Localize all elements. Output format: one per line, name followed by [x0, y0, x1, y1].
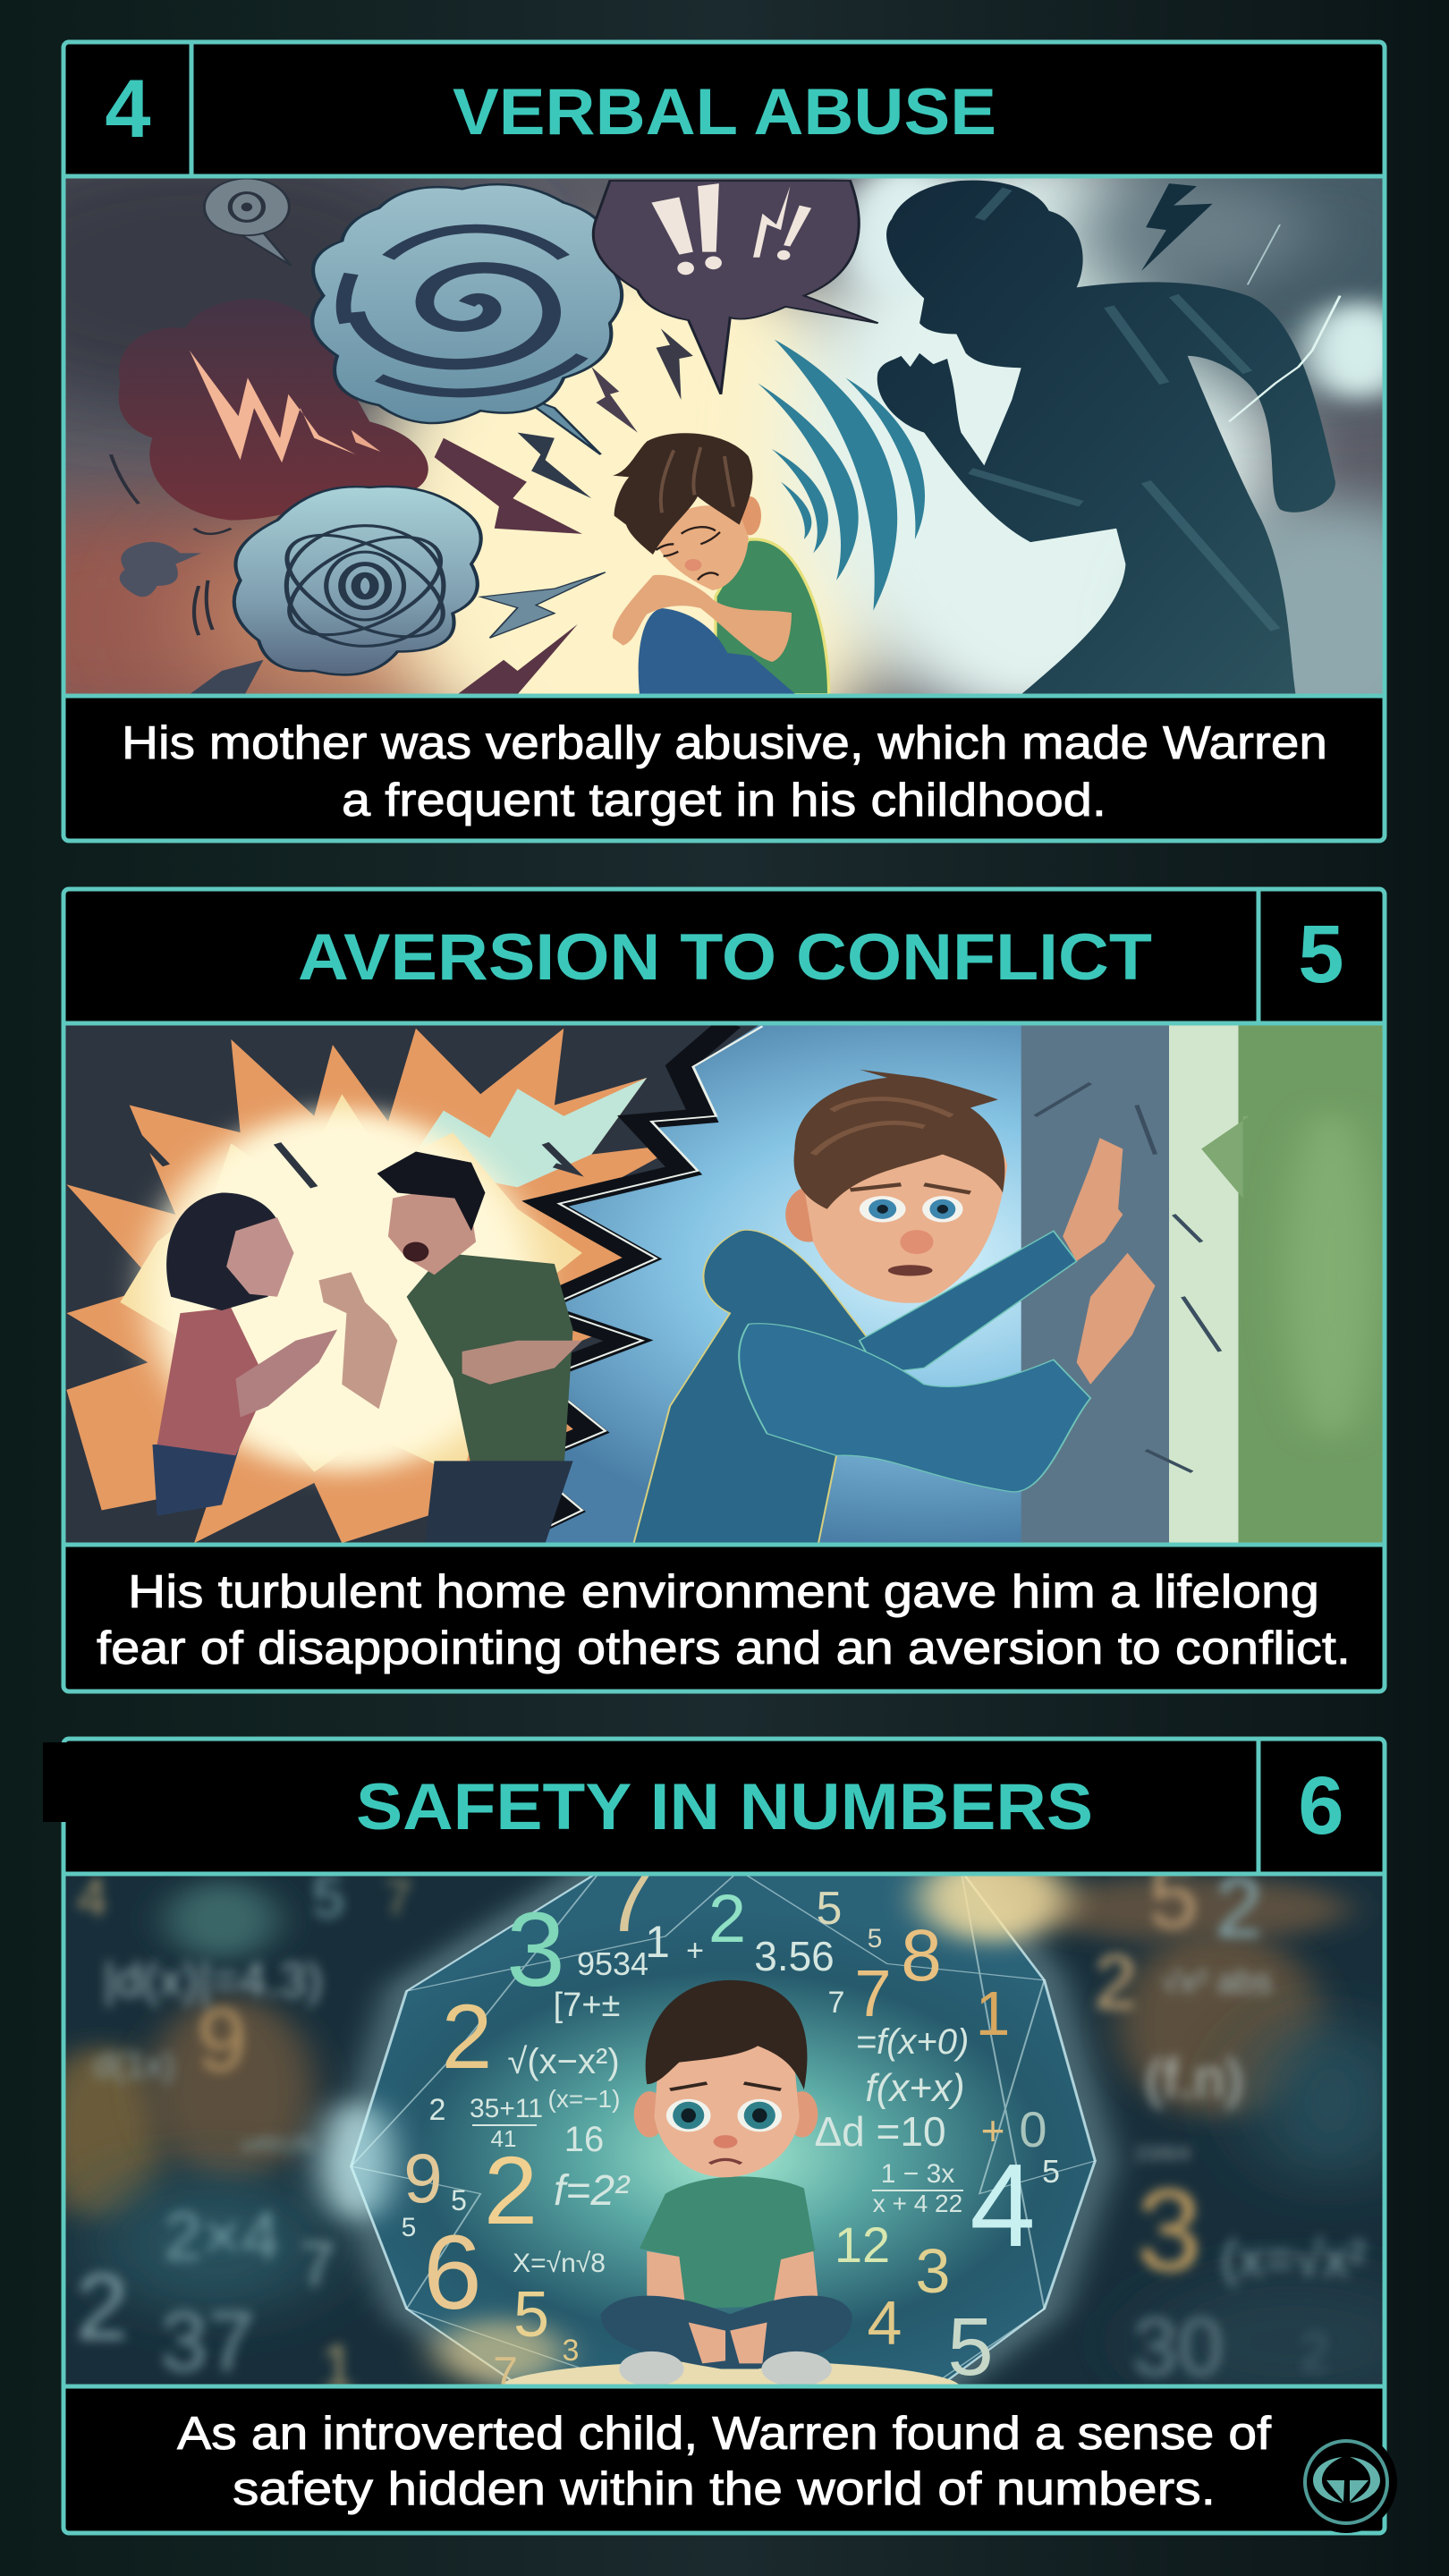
sharp numbers and formulas: =f(x+0)	[856, 2022, 969, 2062]
sharp numbers and formulas: f(x+x)	[865, 2066, 965, 2110]
sharp numbers and formulas: 5	[1042, 2153, 1060, 2190]
panel frame	[64, 1739, 1385, 2533]
blurred numbers right: √x² abs	[1161, 1963, 1272, 2001]
caption: safety in numbers: safety hidden within the world of numbers.	[233, 2463, 1216, 2515]
wall	[1021, 1023, 1391, 1548]
icon: tangled scribble cloud	[234, 487, 481, 674]
heading: verbal abuse: VERBAL ABUSE	[453, 76, 996, 148]
sharp numbers and formulas: 3.56	[754, 1933, 835, 1979]
blurred numbers left: u49125	[242, 2132, 313, 2157]
illustration: arguing parents and frightened boy at wall	[55, 1023, 1395, 1548]
icon: dark storm cloud with lightning	[119, 299, 428, 521]
number 5: 5	[1298, 909, 1344, 1000]
blurred numbers right: 3	[1137, 2165, 1201, 2295]
sharp numbers and formulas: 2	[429, 2093, 445, 2127]
icon: swirl thought cloud	[312, 184, 622, 454]
heading: safety in numbers: SAFETY IN NUMBERS	[356, 1771, 1093, 1843]
glass bubble	[318, 1854, 1095, 2416]
blurred numbers left: |d(x)|=4.3)	[103, 1953, 323, 2007]
sharp numbers and formulas: 4	[868, 2288, 902, 2358]
sharp numbers and formulas: 12	[835, 2216, 890, 2273]
sharp numbers and formulas	[402, 1851, 1060, 2398]
sharp numbers and formulas: 2	[708, 1881, 746, 1957]
number 6: 6	[1298, 1760, 1344, 1852]
icon: exclamation speech bubble	[593, 181, 878, 394]
blurred numbers left: 9	[197, 1990, 247, 2090]
caption: safety in numbers: As an introverted child, Warren found a sense of	[177, 2408, 1272, 2460]
sharp numbers and formulas: 5	[868, 1924, 882, 1953]
sharp numbers and formulas: [7+±	[554, 1987, 620, 2024]
blurred numbers right: 5	[1148, 1847, 1199, 1947]
icon: small dark puff	[111, 454, 263, 694]
blurred numbers right: (f.n)	[1145, 2048, 1243, 2110]
blurred numbers right: 23/6/4	[1135, 2142, 1191, 2165]
blurred background	[37, 1870, 1442, 2407]
blurred numbers left: d(1x)	[93, 2046, 175, 2085]
sharp numbers and formulas: (x=−1)	[548, 2085, 620, 2113]
sharp numbers and formulas: 8	[901, 1915, 942, 1996]
blurred numbers right	[1094, 1847, 1366, 2393]
icon: circular logo	[1295, 2431, 1397, 2533]
explosion burst	[66, 1029, 684, 1543]
sharp numbers and formulas: 35+11	[470, 2094, 543, 2123]
man shouting	[318, 1152, 582, 1543]
caption: aversion to conflict: His turbulent home environment gave him a lifelong	[128, 1566, 1319, 1618]
mother silhouette	[877, 181, 1335, 694]
sharp numbers and formulas: 9	[403, 2139, 443, 2217]
panel frame	[64, 889, 1385, 1691]
sharp numbers and formulas: 5	[817, 1883, 842, 1935]
sharp numbers and formulas: 1	[976, 1979, 1010, 2048]
sharp numbers and formulas: 0	[1019, 2101, 1047, 2157]
sharp numbers and formulas: 3	[916, 2236, 950, 2306]
sharp numbers and formulas: 16	[564, 2120, 604, 2159]
blurred numbers right: 2	[1300, 2322, 1330, 2382]
blurred numbers left: 2×4	[165, 2199, 279, 2275]
sharp numbers and formulas: 5	[947, 2301, 994, 2393]
sharp numbers and formulas: 9534	[577, 1945, 648, 1982]
blurred numbers right: 30	[1132, 2301, 1224, 2393]
blurred numbers left	[76, 1864, 411, 2402]
blurred numbers right: 2	[1094, 1940, 1137, 2025]
sharp numbers and formulas: 7	[604, 1851, 654, 1951]
sharp numbers and formulas: 2	[484, 2136, 538, 2244]
sharp numbers and formulas: 4	[970, 2140, 1036, 2271]
blurred numbers left: 4	[77, 1868, 107, 1928]
woman arguing	[152, 1192, 337, 1516]
sharp numbers and formulas: 3	[563, 2334, 579, 2368]
panel 6: safety in numbers	[37, 1739, 1442, 2533]
sharp numbers and formulas: 7	[493, 2348, 518, 2398]
sharp numbers and formulas: 5	[451, 2184, 467, 2216]
sharp numbers and formulas: x + 4 22	[873, 2190, 962, 2217]
sharp numbers and formulas: Δd =10	[814, 2108, 946, 2155]
illustration: child in bubble of numbers	[37, 1847, 1442, 2416]
blurred numbers left: 2	[76, 2255, 128, 2360]
boy pressed against wall	[633, 1070, 1156, 1546]
caption: safety in numbers	[177, 2408, 1272, 2515]
illustration: boy and shouting mother	[66, 179, 1383, 694]
caption: verbal abuse: a frequent target in his childhood.	[342, 775, 1106, 826]
heading: aversion to conflict: AVERSION TO CONFLICT	[298, 921, 1152, 994]
caption: aversion to conflict	[97, 1566, 1351, 1674]
sharp numbers and formulas: +	[686, 1934, 704, 1968]
panel 4: verbal abuse	[0, 42, 1449, 841]
icon: lightning on storm sky	[1141, 183, 1340, 421]
caption: verbal abuse: His mother was verbally abusive, which made Warren	[122, 717, 1327, 769]
sharp numbers and formulas: √(x−x²)	[507, 2042, 620, 2081]
black patch over frame corner	[43, 1742, 79, 1822]
sharp numbers and formulas: X=√n√8	[513, 2249, 606, 2278]
sharp numbers and formulas: 41	[491, 2125, 516, 2152]
sharp numbers and formulas: 3	[506, 1891, 565, 2009]
sharp numbers and formulas: 1	[645, 1917, 670, 1967]
boy hugging knees	[613, 433, 829, 695]
panel frame	[64, 42, 1385, 841]
blurred numbers left: 1	[321, 2332, 355, 2402]
sharp numbers and formulas: 5	[513, 2279, 549, 2351]
blurred numbers left: 5	[312, 1864, 344, 1929]
icon: blue sound waves	[758, 340, 925, 611]
caption: verbal abuse	[122, 717, 1327, 826]
panel 5: aversion to conflict	[55, 889, 1395, 1691]
blurred numbers right: (x=√x²	[1221, 2230, 1366, 2288]
sharp numbers and formulas: 5	[402, 2213, 416, 2242]
caption: aversion to conflict: fear of disappointing others and an aversion to conflict.	[97, 1623, 1351, 1674]
crack divider	[495, 1023, 762, 1546]
icon: small spiral speech bubble	[204, 179, 291, 266]
blurred numbers left: 7	[385, 1869, 411, 1925]
sharp numbers and formulas: 7	[854, 1956, 892, 2030]
blurred numbers right: 2	[1216, 1860, 1262, 1955]
sharp numbers and formulas: f=2²	[554, 2167, 631, 2215]
sad boy sitting cross-legged	[601, 1980, 852, 2386]
sharp numbers and formulas: +	[981, 2107, 1004, 2154]
sharp numbers and formulas: 1 − 3x	[881, 2159, 954, 2189]
blurred numbers left: 37	[160, 2294, 255, 2389]
right blue background	[508, 1023, 1026, 1548]
sharp numbers and formulas: 6	[423, 2214, 482, 2332]
icon: lightning bolts toward boy	[435, 328, 693, 694]
sharp numbers and formulas: 2	[442, 1986, 492, 2088]
number 4: 4	[105, 64, 151, 155]
blurred numbers left: 7	[301, 2229, 335, 2299]
sharp numbers and formulas: 7	[828, 1986, 844, 2020]
